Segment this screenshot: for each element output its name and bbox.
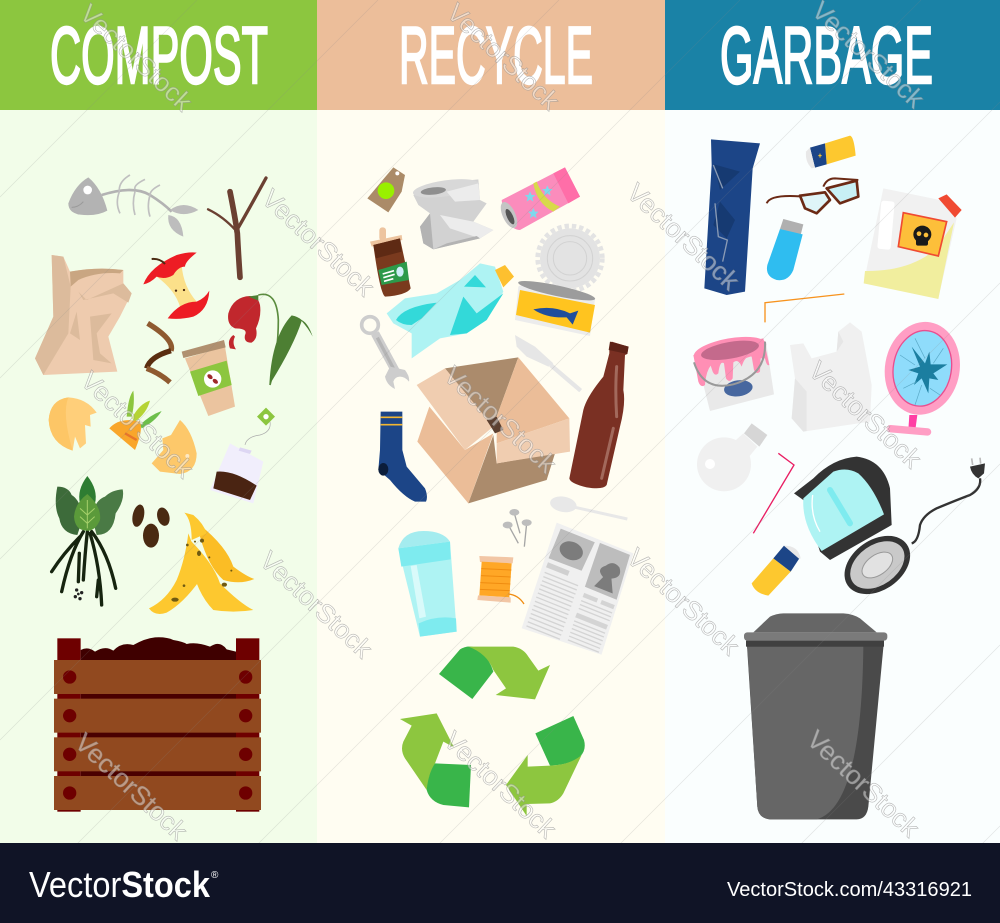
panel: recycle column — [317, 0, 665, 843]
arrow: top recycling arrow — [439, 646, 550, 699]
icon: plastic cup — [398, 531, 457, 637]
icon: kraft tag — [367, 167, 405, 212]
icon: electric kettle — [794, 457, 892, 560]
icon: blue crumpled tube — [704, 139, 760, 295]
icon: small sauce bottle — [370, 227, 411, 297]
footer bar — [0, 843, 1000, 923]
panel: garbage column — [665, 0, 1000, 843]
watermarks — [69, 0, 931, 847]
arrow: right recycling arrow — [506, 716, 585, 816]
icon: tuna can — [515, 277, 596, 336]
icon: paint can — [692, 332, 774, 411]
watermarks: VectorStock — [621, 177, 746, 297]
icon: plant with roots — [52, 476, 123, 605]
icon: eggshell left — [49, 397, 97, 451]
icon: plastic knife — [515, 335, 581, 391]
watermarks: VectorStock — [75, 365, 200, 485]
icon: tin can lid — [538, 226, 602, 291]
icon: eyeglasses — [767, 178, 858, 213]
registered mark: ® — [211, 870, 219, 881]
compost items — [35, 175, 313, 614]
icon: kettle base and cord — [834, 458, 985, 606]
column background: compost — [0, 110, 317, 843]
watermarks: VectorStock — [801, 724, 926, 844]
icon: crumpled paper bag — [35, 255, 132, 375]
icon: banana peel — [149, 513, 254, 614]
icon: recycling symbol — [400, 646, 585, 816]
column background: recycle — [317, 110, 665, 843]
icon: twig — [208, 178, 266, 277]
icon: battery bottom — [752, 546, 801, 596]
watermarks: VectorStock — [74, 0, 199, 118]
icon: orange bent straw — [765, 294, 844, 322]
icon: pink soda can — [497, 167, 580, 230]
icon: newspaper — [515, 523, 641, 659]
header: compost: COMPOST — [50, 11, 268, 101]
header: recycle: RECYCLE — [399, 11, 593, 101]
panel: compost column — [0, 0, 317, 843]
column background: garbage — [665, 110, 1000, 843]
icon: USB stick — [767, 219, 803, 280]
icon: pink straw — [753, 453, 794, 533]
recycle items — [362, 167, 641, 659]
watermarks: VectorStock — [438, 360, 563, 480]
footer url: VectorStock.com/43316921 — [727, 879, 972, 901]
icon: carrot top — [109, 391, 162, 450]
icon: plastic bag — [790, 322, 872, 432]
icon: blue sock — [378, 412, 427, 502]
watermarks: VectorStock — [69, 727, 194, 847]
footer logo: VectorStock — [29, 864, 211, 905]
icon: battery top — [806, 136, 856, 168]
icon: wilted tulip — [228, 294, 313, 385]
icon: crushed tin can — [412, 176, 493, 249]
header: compost — [0, 0, 317, 110]
icon: apple core — [143, 252, 209, 319]
header: garbage — [665, 0, 1000, 110]
header: recycle — [317, 0, 665, 110]
icon: eggshell right — [152, 420, 197, 474]
icon: wooden compost crate — [54, 637, 261, 812]
watermarks: VectorStock — [621, 542, 746, 662]
icon: crumpled plastic bottle — [387, 263, 514, 358]
icon: fish bones — [68, 175, 198, 237]
icon: brown glass bottle — [569, 342, 629, 488]
icon: cracked mirror — [877, 316, 967, 436]
icon: coffee cup — [182, 340, 235, 416]
watermarks: VectorStock — [256, 183, 381, 303]
icon: wrench — [362, 317, 409, 389]
icon: light bulb — [697, 423, 767, 491]
watermarks: VectorStock — [438, 725, 563, 845]
watermarks: VectorStock — [803, 355, 928, 475]
icon: nails — [503, 509, 532, 547]
icon: brown peel — [147, 323, 172, 382]
icon: cardboard box — [417, 357, 570, 503]
icon: thread spool — [477, 556, 524, 604]
watermarks: VectorStock — [254, 545, 379, 665]
garbage items — [692, 136, 985, 606]
icon: tea bag — [210, 408, 275, 503]
arrow: left recycling arrow — [400, 713, 471, 807]
icon: plastic spoon — [549, 494, 627, 519]
icon: poison jug — [864, 188, 962, 299]
icon: garbage bin — [744, 613, 887, 819]
icon: seeds — [130, 503, 172, 548]
watermarks: VectorStock — [441, 0, 566, 117]
